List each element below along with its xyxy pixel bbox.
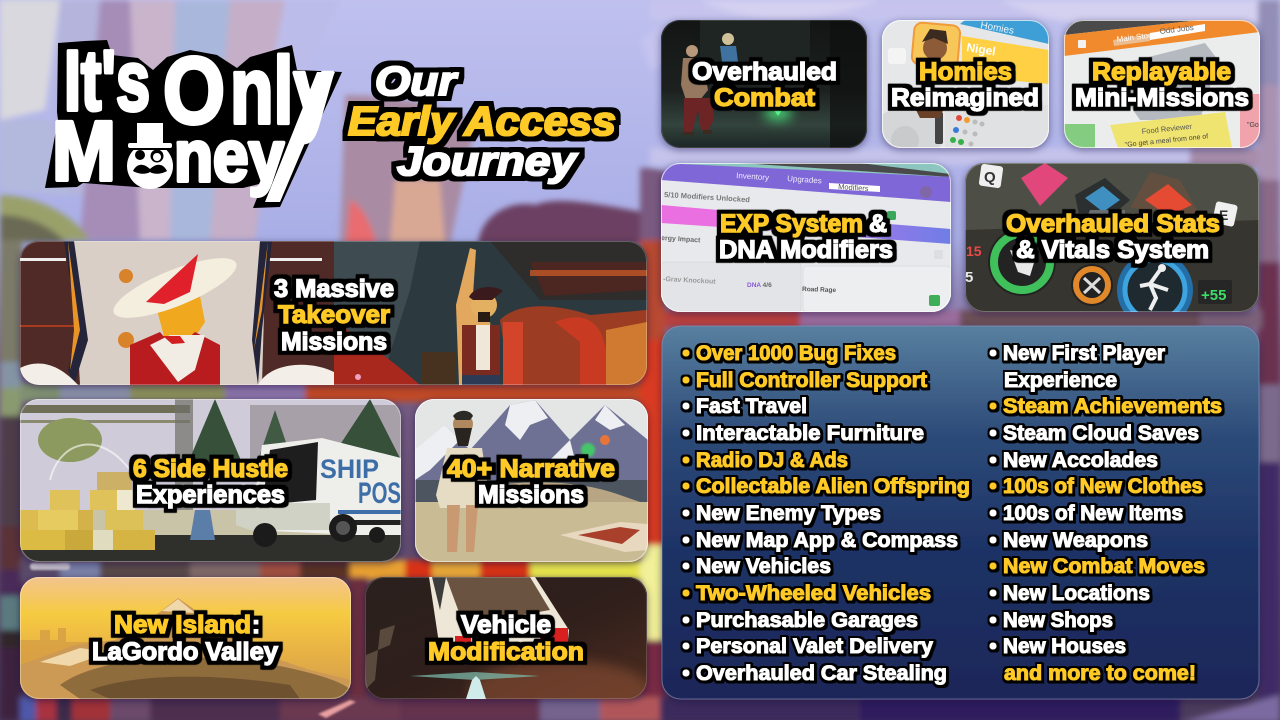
- label: Overhauled Combat: Combat: [714, 84, 816, 112]
- scene: shipping van and cardboard boxes: [20, 399, 401, 562]
- scene: mission menu screenshot: Food Reviewer: [1141, 122, 1193, 136]
- label: New Island LaGordo Valley: [92, 611, 278, 666]
- scene: stats and vitals HUD icons: 15: [966, 243, 982, 259]
- label: Vehicle Modification: Modification: [428, 638, 584, 666]
- label: Overhauled Combat: [692, 58, 837, 112]
- icon: monocle face with top hat: [126, 123, 174, 189]
- list: right column features: [990, 342, 1222, 685]
- scene: stats and vitals HUD icons: [965, 163, 1259, 328]
- label: EXP System and DNA Modifiers: EXP System: [720, 210, 863, 238]
- heading: Our Early Access Journey: [348, 58, 616, 184]
- list: right column features: New Accolades: [1003, 449, 1158, 472]
- list: right column features: 100s of New Clothes: [1003, 475, 1203, 498]
- scene: mission menu screenshot: "Go get a meal from one of: [1124, 133, 1209, 149]
- logo: It's Only Money: nly: [230, 38, 333, 144]
- list: left column features: Interactable Furniture: [696, 422, 924, 445]
- label: Homies Reimagined: [891, 58, 1039, 112]
- heading: Our Early Access Journey: Our: [375, 58, 458, 104]
- panel: Vehicle Modification: [365, 577, 650, 720]
- panel: Overhauled Stats and Vitals System: [965, 163, 1259, 328]
- scene: shipping van and cardboard boxes: SHIP: [320, 454, 379, 484]
- label: Homies Reimagined: Homies: [919, 58, 1012, 86]
- list: left column features: Fast Travel: [696, 395, 807, 418]
- label: Homies Reimagined: Reimagined: [891, 84, 1039, 112]
- label: Vehicle Modification: [428, 611, 584, 666]
- scene: mission menu screenshot: [1064, 20, 1260, 149]
- label: 3 Massive Takeover Missions: [274, 275, 394, 356]
- list: right column features: New Shops: [1003, 609, 1113, 632]
- scene: homies menu screenshot: [882, 20, 1055, 154]
- panel: 6 Side Hustle Experiences: [20, 399, 401, 562]
- logo: It's Only Money: O: [163, 38, 225, 144]
- list: left column features: Personal Valet Delivery: [696, 635, 933, 658]
- scene: stats and vitals HUD icons: +55: [1201, 287, 1226, 304]
- list: right column features: and more to come!: [1004, 662, 1196, 685]
- label: New Island LaGordo Valley: :: [252, 611, 260, 639]
- label: Replayable Mini-Missions: [1075, 58, 1249, 112]
- scene: stats and vitals HUD icons: Q: [984, 169, 996, 186]
- logo: It's Only Money: [45, 34, 342, 208]
- scene: bearded man in front of snowy mountains: [415, 399, 648, 562]
- panel: Homies Reimagined: [882, 20, 1055, 154]
- label: 40+ Narrative Missions: 40+ Narrative: [447, 455, 615, 483]
- scene: two fighters in dark room: [661, 20, 867, 148]
- list: right column features: New Combat Moves: [1003, 555, 1205, 578]
- scene: modifiers menu screenshot: -Grav Knockout: [663, 276, 716, 286]
- scene: modifiers menu screenshot: Modifiers: [838, 182, 869, 193]
- logo: It's Only Money: ney: [174, 117, 284, 197]
- logo: It's Only Money: M: [52, 104, 116, 198]
- list: left column features: Full Controller Support: [696, 369, 927, 392]
- heading: Our Early Access Journey: Early Access: [348, 98, 616, 144]
- list: right column features: New First Player: [1003, 342, 1165, 365]
- list: right column features: New Houses: [1003, 635, 1126, 658]
- panel: 3 Massive Takeover Missions: [20, 241, 647, 385]
- label: 3 Massive Takeover Missions: Takeover: [278, 301, 390, 329]
- list: left column features: Overhauled Car Stealing: [696, 662, 947, 685]
- scene: mission menu screenshot: "Go: [1247, 122, 1259, 129]
- scene: mission menu screenshot: Odd Jobs: [1159, 23, 1194, 36]
- scene: shipping van and cardboard boxes: POS: [358, 477, 401, 510]
- scene: modifiers menu screenshot: Inventory: [736, 171, 769, 182]
- list: left column features: Collectable Alien Offspring: [696, 475, 970, 498]
- scene: hat lady and cowboy characters: [20, 241, 647, 385]
- label: EXP System and DNA Modifiers: &: [869, 210, 887, 238]
- list: left column features: New Vehicles: [696, 555, 831, 578]
- list: left column features: New Map App & Compass: [696, 529, 958, 552]
- scene: homies menu screenshot: Homies: [979, 20, 1015, 37]
- list: right column features: Steam Cloud Saves: [1003, 422, 1199, 445]
- heading: Our Early Access Journey: Journey: [397, 138, 578, 184]
- panel: 40+ Narrative Missions: [415, 399, 648, 562]
- list: left column features: Radio DJ & Ads: [696, 449, 848, 472]
- label: 6 Side Hustle Experiences: 6 Side Hustle: [133, 455, 288, 483]
- label: 6 Side Hustle Experiences: [133, 455, 288, 509]
- label: New Island LaGordo Valley: LaGordo Valley: [92, 638, 278, 666]
- list: left column features: Over 1000 Bug Fixes: [696, 342, 896, 365]
- label: Overhauled Combat: Overhauled: [692, 58, 837, 86]
- list: left column features: [682, 342, 970, 685]
- label: EXP System and DNA Modifiers: [719, 210, 893, 264]
- scene: modifiers menu screenshot: Road Rage: [802, 286, 836, 294]
- label: 3 Massive Takeover Missions: Missions: [281, 328, 387, 356]
- label: Vehicle Modification: Vehicle: [461, 611, 551, 639]
- label: Overhauled Stats and Vitals System: & Vitals System: [1016, 236, 1209, 264]
- label: EXP System and DNA Modifiers: DNA Modifiers: [719, 236, 893, 264]
- scene: mission menu screenshot: Main Story: [1116, 30, 1155, 44]
- panel: Replayable Mini-Missions: [1064, 20, 1260, 149]
- list: left column features: Purchasable Garages: [696, 609, 918, 632]
- scene: modifiers menu screenshot: 5/10 Modifiers Unlocked: [664, 190, 751, 204]
- scene: modifiers menu screenshot: Upgrades: [787, 174, 822, 185]
- list: right column features: New Weapons: [1003, 529, 1148, 552]
- logo: It's Only Money: It's: [64, 34, 150, 129]
- panel: New Island LaGordo Valley: [20, 577, 351, 699]
- scene: modifiers menu screenshot: DNA 4/6: [747, 282, 772, 289]
- label: 3 Massive Takeover Missions: 3 Massive: [274, 275, 394, 303]
- scene: modifiers menu screenshot: [661, 163, 951, 312]
- label: New Island LaGordo Valley: New Island: [114, 611, 251, 639]
- label: Overhauled Stats and Vitals System: [1006, 210, 1220, 264]
- label: Overhauled Stats and Vitals System: Overhauled Stats: [1006, 210, 1220, 238]
- label: 6 Side Hustle Experiences: Experiences: [136, 481, 285, 509]
- label: Replayable Mini-Missions: Mini-Missions: [1075, 84, 1249, 112]
- list: right column features: New Locations: [1003, 582, 1150, 605]
- scene: stats and vitals HUD icons: 5: [965, 269, 973, 286]
- panel: Overhauled Combat: [661, 20, 867, 148]
- list: right column features: Steam Achievements: [1003, 395, 1222, 418]
- scene: sunset island landscape: [20, 577, 351, 699]
- list: right column features: 100s of New Items: [1003, 502, 1183, 525]
- label: Replayable Mini-Missions: Replayable: [1092, 58, 1231, 86]
- scene: modifiers menu screenshot: ergy Impact: [661, 235, 701, 244]
- panel: EXP System and DNA Modifiers: [661, 163, 951, 312]
- label: 40+ Narrative Missions: [447, 455, 615, 509]
- scene: stats and vitals HUD icons: E: [1219, 207, 1228, 223]
- list: left column features: New Enemy Types: [696, 502, 881, 525]
- scene: homies menu screenshot: Nigel: [966, 40, 997, 59]
- list: right column features: Experience: [1004, 369, 1117, 392]
- panel: feature list: [662, 326, 1259, 699]
- list: left column features: Two-Wheeled Vehicles: [696, 582, 931, 605]
- scene: white car from above on dark road: [365, 577, 647, 699]
- label: 40+ Narrative Missions: Missions: [478, 481, 584, 509]
